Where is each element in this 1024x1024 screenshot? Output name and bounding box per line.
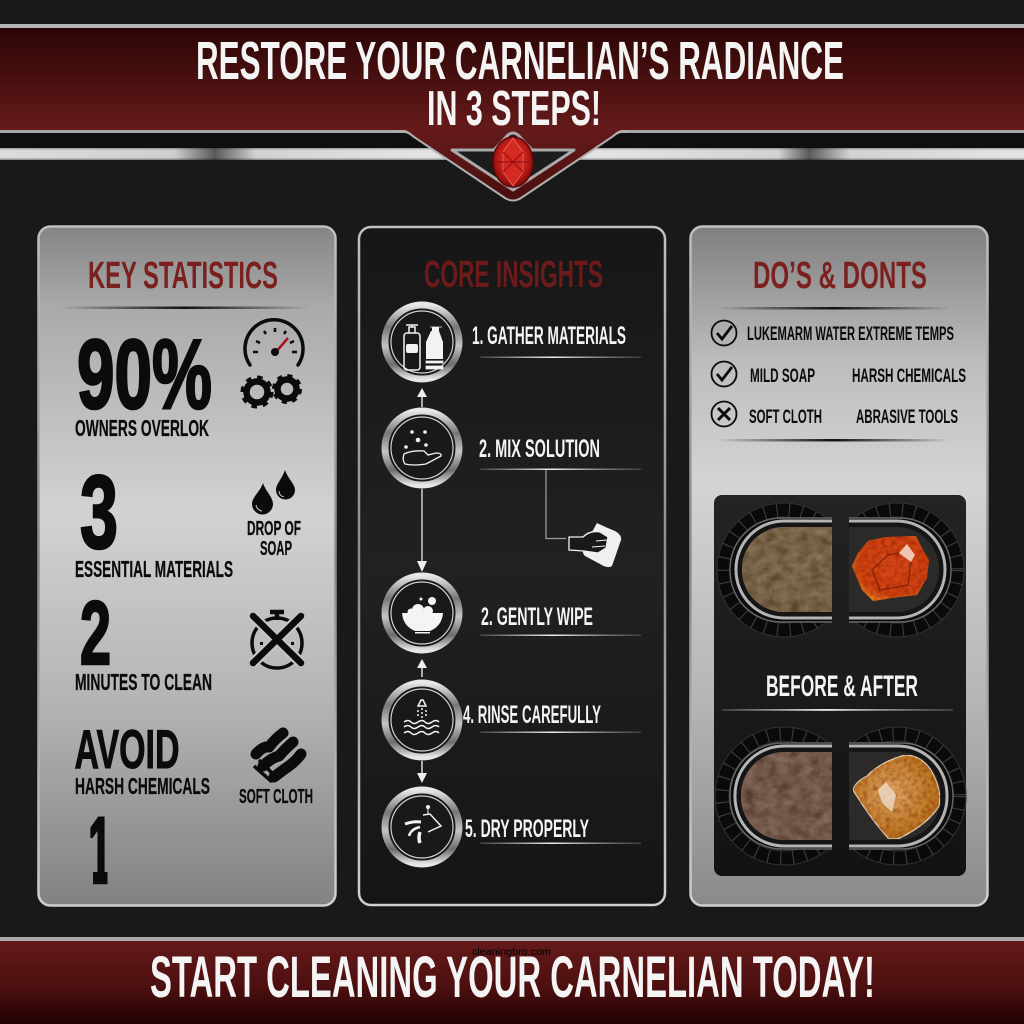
- stat: avoid harsh chemicals: AVOID: [74, 718, 180, 780]
- label: soft cloth: SOFT CLOTH: [239, 786, 313, 808]
- title: IN 3 STEPS!: [427, 82, 601, 136]
- stat: 3 essential materials: 3: [80, 455, 118, 571]
- stat: 3 essential materials: ESSENTIAL MATERIALS: [75, 556, 233, 582]
- arrow: step 4 to step 3: [417, 659, 427, 677]
- step 5: dry properly: 5. DRY PROPERLY: [465, 815, 589, 843]
- after image, top: [849, 502, 964, 638]
- connector to wipe icon: [546, 470, 566, 538]
- step 5: dry properly: [385, 790, 641, 864]
- heading: core insights: CORE INSIGHTS: [424, 254, 603, 296]
- emblem: ruby gem: [452, 133, 574, 190]
- stone: cleaned carnelian: [853, 755, 940, 839]
- icon: gauge and gears: [242, 320, 303, 406]
- step 3: gently wipe: [385, 576, 641, 650]
- icon: soap drops: [247, 470, 301, 560]
- watermark: cleaningbro.com: [472, 947, 551, 958]
- step 1: gather materials: 1. GATHER MATERIALS: [472, 322, 626, 350]
- panel: core insights: [359, 227, 665, 905]
- icon: hand wiping with cloth: [569, 523, 621, 567]
- arrow: step 2 to step 1: [417, 388, 427, 407]
- before image, bottom: [714, 726, 832, 866]
- label: drop of soap: DROP OF: [247, 518, 301, 540]
- step 4: rinse carefully: [385, 683, 641, 757]
- row: lukewarm water: [712, 320, 954, 346]
- stat: 2 minutes to clean: 2: [80, 584, 111, 684]
- label: drop of soap: [247, 518, 301, 560]
- icon: water waves and drop: [404, 700, 439, 734]
- icon: soft cloth: [239, 733, 313, 808]
- step 1: gather materials: [385, 305, 641, 379]
- panel: key statistics: [38, 226, 336, 906]
- icon: crossed stopwatch: [252, 612, 302, 668]
- row: mild soap: MILD SOAP: [750, 366, 815, 387]
- icon: bowl with foam: [402, 597, 443, 634]
- step 2: mix solution: 2. MIX SOLUTION: [479, 435, 600, 463]
- panel: do's and don'ts: [690, 226, 988, 906]
- stat: avoid harsh chemicals: HARSH CHEMICALS: [75, 773, 210, 799]
- header banner: [0, 24, 1024, 200]
- stat: 2 minutes to clean: [75, 584, 212, 695]
- before and after box: [714, 495, 966, 876]
- heading: key statistics: KEY STATISTICS: [88, 255, 278, 297]
- stat: 90% owners overlook: OWNERS OVERLOK: [75, 415, 209, 441]
- panel: key statistics: 1: [88, 798, 112, 904]
- step 2: mix solution: [385, 411, 641, 485]
- stat: 90% owners overlook: [75, 319, 212, 441]
- after image, bottom: [849, 726, 966, 866]
- gem: polished carnelian: [852, 536, 929, 601]
- icon: air flow: [405, 806, 441, 843]
- step 4: rinse carefully: 4. RINSE CAREFULLY: [463, 701, 601, 729]
- arrow: step 4 to step 5: [417, 761, 427, 783]
- stat: 3 essential materials: [75, 455, 233, 582]
- footer banner: [0, 937, 1024, 1024]
- step 3: gently wipe: 2. GENTLY WIPE: [481, 603, 593, 631]
- icon: bottles: [404, 325, 443, 370]
- heading: do's and don'ts: DO’S & DONTS: [753, 255, 927, 297]
- icon: hand with drops: [403, 430, 441, 465]
- row: soft cloth: ABRASIVE TOOLS: [856, 407, 958, 428]
- before image, top: [716, 502, 832, 638]
- row: soft cloth: [712, 402, 958, 428]
- row: soft cloth: SOFT CLOTH: [749, 407, 822, 428]
- row: mild soap: [712, 362, 966, 387]
- title: [196, 31, 844, 136]
- stat: avoid harsh chemicals: [74, 718, 210, 799]
- stat: 2 minutes to clean: MINUTES TO CLEAN: [75, 669, 212, 695]
- stat: 90% owners overlook: 90%: [77, 319, 212, 429]
- label: before and after: BEFORE & AFTER: [766, 670, 918, 703]
- label: drop of soap: SOAP: [260, 538, 292, 560]
- arrow: step 2 to step 3: [417, 489, 427, 572]
